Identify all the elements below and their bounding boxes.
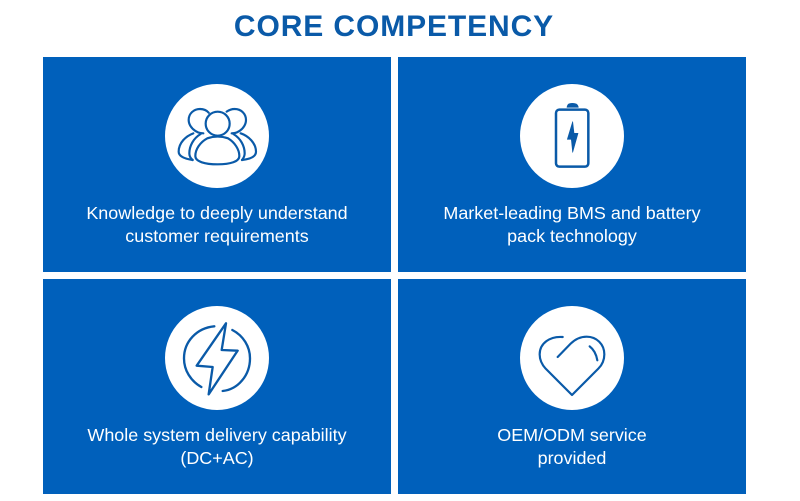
text: whole system delivery: [87, 425, 347, 468]
text: OEM/ODM service: [497, 425, 647, 468]
panel: customer requirements: [43, 57, 391, 272]
icon: battery: [520, 84, 624, 188]
icon: lightning in ring: [165, 306, 269, 410]
text: OEM/ODM service: provided: [538, 448, 606, 468]
text: whole system delivery: (DC+AC): [180, 448, 254, 468]
panel: whole system delivery: [43, 279, 391, 494]
text: whole system delivery: Whole system delivery capability: [87, 425, 347, 445]
icon: heart: [520, 306, 624, 410]
icon: group of people: [165, 84, 269, 188]
title: CORE COMPETENCY: [234, 10, 554, 43]
text: OEM/ODM service: OEM/ODM service: [497, 425, 647, 445]
text: customer requirements: [86, 203, 348, 246]
text: BMS and battery pack: Market-leading BMS and battery: [443, 203, 701, 223]
text: BMS and battery pack: [443, 203, 701, 246]
panel: OEM/ODM service: [398, 279, 746, 494]
text: customer requirements: Knowledge to deeply understand: [86, 203, 348, 223]
panel: BMS and battery pack: [398, 57, 746, 272]
text: BMS and battery pack: pack technology: [507, 226, 637, 246]
text: customer requirements: customer requirements: [125, 226, 309, 246]
